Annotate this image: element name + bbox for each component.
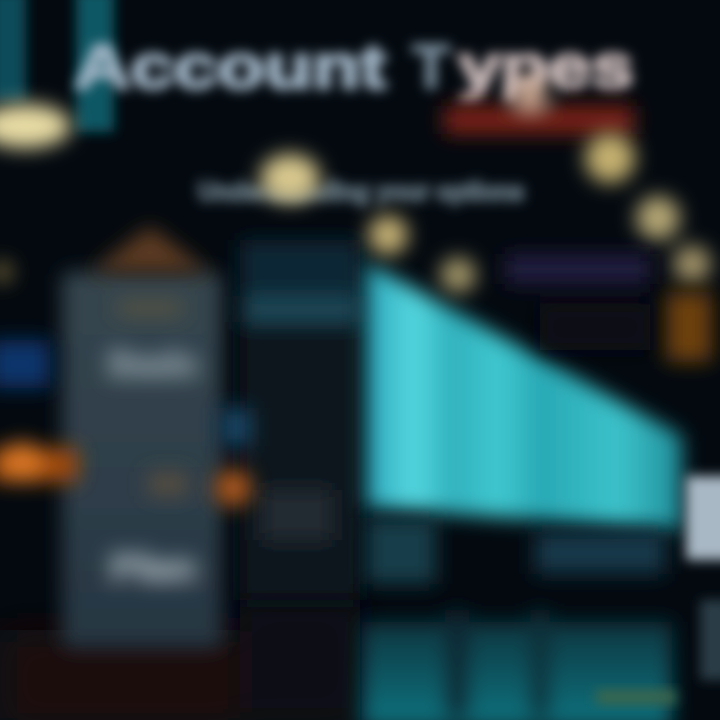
floor glow [0, 600, 360, 720]
left column text: Plan [110, 547, 196, 588]
title: Account [74, 33, 386, 102]
panel: middle column [240, 240, 360, 600]
panel: cyan wedge [366, 262, 682, 530]
icon: right orange lantern [666, 292, 712, 362]
title: ypes [458, 33, 634, 102]
panel: top-left teal blocks [0, 0, 114, 132]
left column text: Basic [108, 343, 198, 384]
panel: left column [62, 272, 222, 648]
icon: ceiling lamps [0, 133, 711, 293]
icon: corner lamp [0, 104, 71, 148]
left column text [108, 343, 198, 588]
logo badge [596, 690, 676, 704]
title underline glow [444, 76, 634, 134]
cyan wedge lower tones [366, 518, 665, 584]
reflection [362, 610, 672, 720]
panel: right purple band [505, 254, 650, 350]
panel: right white block [686, 476, 720, 680]
title [74, 33, 634, 102]
subtitle: Understanding your options [198, 176, 524, 206]
panel: left side glows [0, 340, 252, 507]
title: T [412, 33, 450, 102]
left column cap [90, 226, 210, 314]
